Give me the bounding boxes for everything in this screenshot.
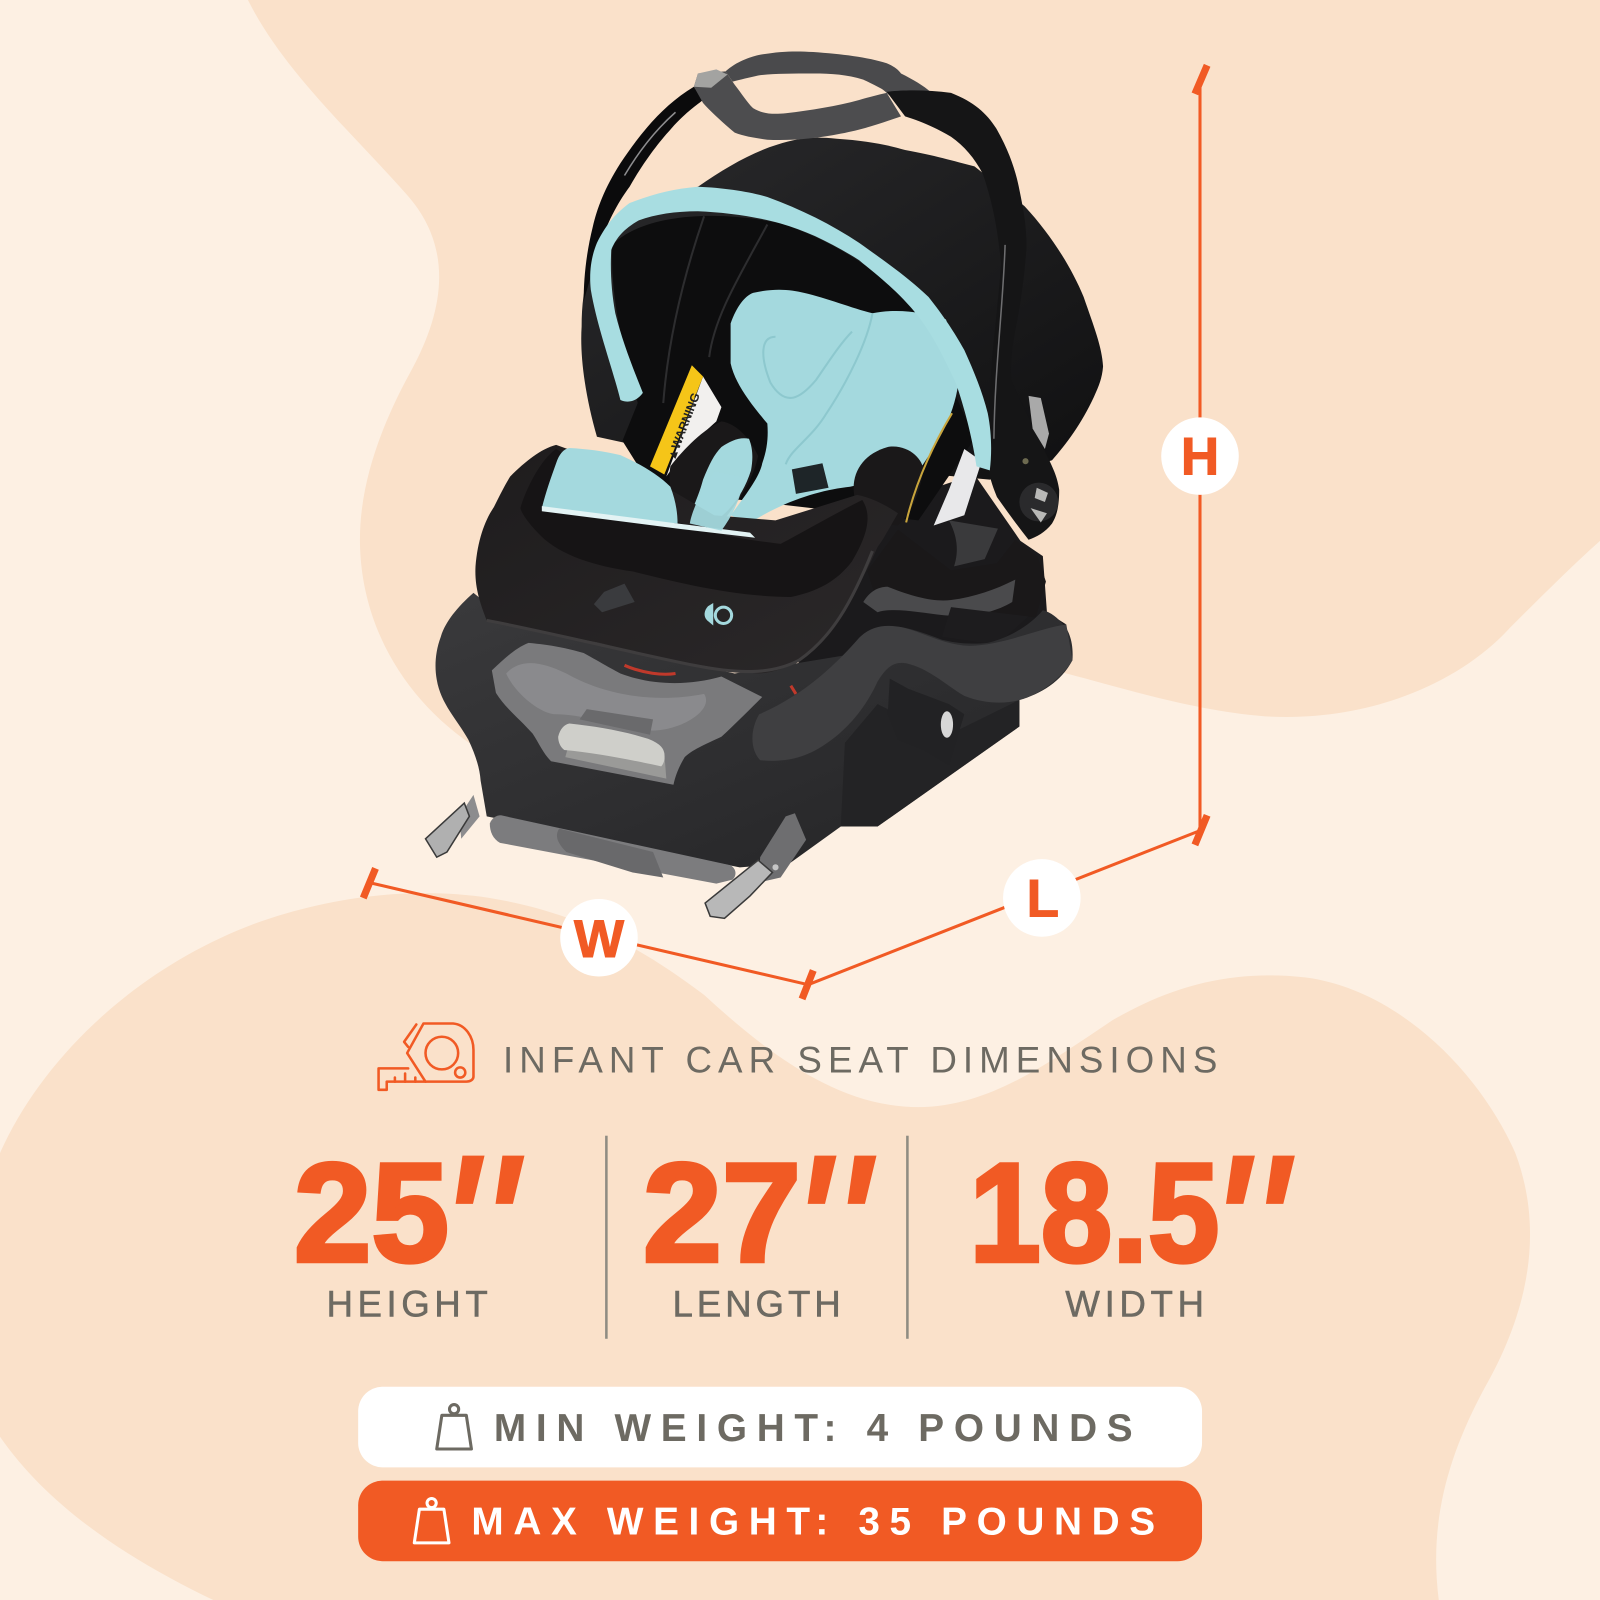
L marker: L xyxy=(1027,869,1059,928)
red belt under cushion xyxy=(624,665,796,694)
max weight pill xyxy=(358,1481,1202,1561)
height value: 25 xyxy=(294,1134,449,1291)
width value: 18.5 xyxy=(969,1134,1219,1291)
blue strap pad xyxy=(687,438,752,523)
seat buckle strap xyxy=(792,463,829,494)
min weight pill xyxy=(358,1387,1202,1467)
length value: LENGTH xyxy=(672,1283,841,1324)
heading: INFANT CAR SEAT DIMENSIONS xyxy=(503,1039,1217,1080)
seat shell right xyxy=(867,530,1046,617)
W marker xyxy=(560,899,638,977)
pad white edge xyxy=(542,506,755,538)
canopy blue rim xyxy=(590,187,991,470)
height value xyxy=(294,1113,523,1346)
seat inner rim xyxy=(520,449,868,597)
canopy back xyxy=(581,138,1103,480)
height value: '' xyxy=(437,1113,523,1346)
handle hub badge xyxy=(1019,396,1058,522)
dark backing behind seat and base junction xyxy=(796,474,1066,673)
second pad front xyxy=(690,471,745,531)
base latch button xyxy=(558,709,666,779)
background blob: bottom xyxy=(0,893,1530,1600)
max weight pill: MAX WEIGHT: 35 POUNDS xyxy=(471,1501,1155,1544)
width value: WIDTH xyxy=(1065,1283,1204,1324)
product photo: infant car seat xyxy=(426,51,1103,918)
recline badge and latch xyxy=(888,679,964,765)
icon: tape measure xyxy=(379,1023,473,1090)
divider xyxy=(605,1136,608,1339)
base grey insert xyxy=(492,643,762,785)
L marker xyxy=(1003,859,1081,937)
W marker: W xyxy=(574,910,625,969)
base main body xyxy=(436,593,1073,867)
seat lower front cushion xyxy=(475,445,898,673)
dimension lines xyxy=(363,65,1239,999)
seat pad stitching xyxy=(763,313,872,464)
H marker: H xyxy=(1181,427,1219,486)
icon: weight xyxy=(414,1498,449,1543)
handle left arm xyxy=(584,87,703,301)
height value: HEIGHT xyxy=(327,1283,488,1324)
right shoulder pad xyxy=(854,447,923,526)
handle right arm xyxy=(887,90,1059,540)
min weight pill: MIN WEIGHT: 4 POUNDS xyxy=(494,1407,1133,1450)
crotch strap xyxy=(594,584,635,612)
under-tray dark body xyxy=(942,607,1029,645)
car seat base xyxy=(426,593,1073,918)
background blob: top right xyxy=(248,0,1600,750)
base side lower panel xyxy=(841,700,1019,827)
white side panel and yellow trim xyxy=(934,449,982,526)
warning label xyxy=(650,365,721,477)
divider xyxy=(906,1136,909,1339)
handle grip upper bar xyxy=(726,51,931,95)
canopy interior xyxy=(612,216,974,520)
base tray upper highlight xyxy=(752,624,1072,761)
width value: '' xyxy=(1207,1113,1293,1346)
cushion blue pad xyxy=(542,448,678,523)
left metal foot xyxy=(426,795,480,857)
width line xyxy=(363,868,813,999)
warning label: ▲WARNING xyxy=(664,391,703,462)
width value xyxy=(969,1113,1293,1346)
handle grip lower bar xyxy=(694,71,901,140)
H marker xyxy=(1161,417,1239,495)
bottom grey foot xyxy=(490,815,735,884)
main seat pad xyxy=(731,290,958,523)
icon: weight xyxy=(437,1405,471,1449)
length value: 27 xyxy=(643,1134,801,1291)
length value: '' xyxy=(789,1113,875,1346)
right metal foot xyxy=(705,813,806,918)
embroidered logo xyxy=(705,603,732,626)
length line xyxy=(808,831,1200,985)
measurements row xyxy=(294,1113,1293,1346)
height line xyxy=(1195,65,1207,845)
black shoulder strap pad xyxy=(670,421,758,526)
cushion edge trim xyxy=(487,551,872,672)
length value xyxy=(643,1113,875,1346)
